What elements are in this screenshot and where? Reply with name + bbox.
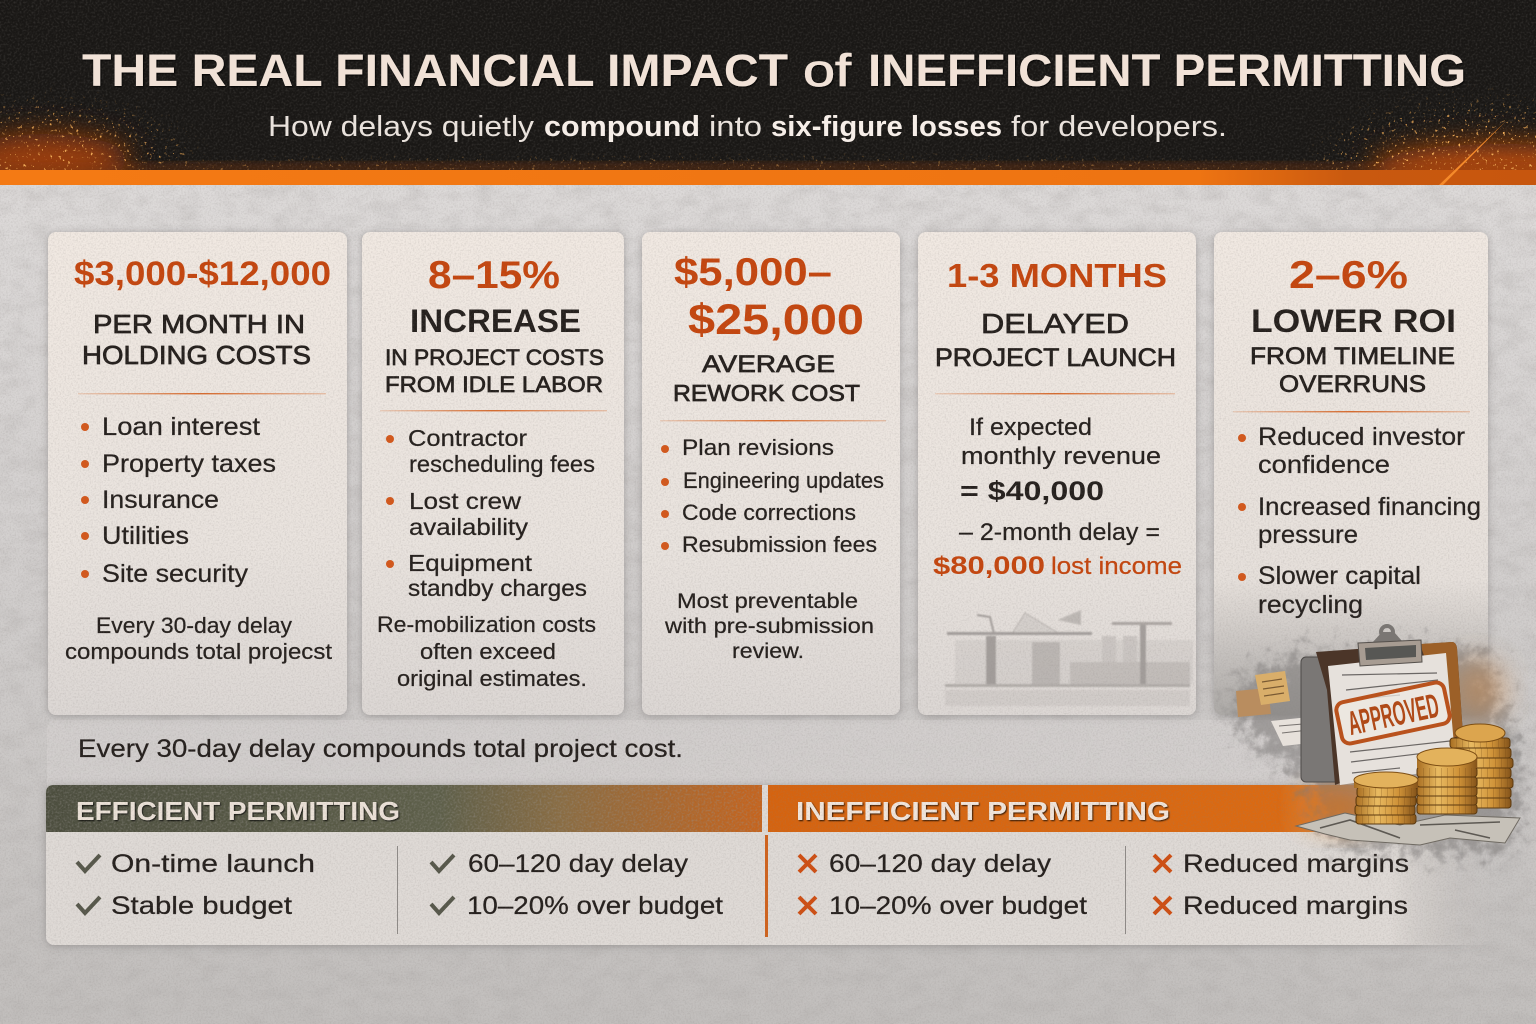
column: efficient left: Stable budget	[111, 892, 292, 920]
callout: delay compounds: Every 30-day delay compounds total project cost.	[78, 735, 683, 763]
list: holding cost items: Site security	[102, 560, 249, 588]
illustration: approved clipboard and coins	[1235, 626, 1520, 850]
note: pre-submission review: with pre-submission	[664, 615, 874, 638]
calculation: lost income: lost income	[1051, 553, 1182, 580]
heading: average rework cost	[673, 351, 860, 406]
header: efficient permitting	[46, 785, 762, 832]
list: idle labor items: standby charges	[408, 575, 587, 601]
list: ROI items: Reduced investor	[1258, 423, 1465, 451]
note: re-mobilization costs	[377, 612, 596, 691]
column: efficient left	[77, 850, 315, 920]
list: rework items: Resubmission fees	[682, 532, 877, 557]
list: holding cost items: Property taxes	[102, 450, 276, 478]
note: compounding delay: Every 30-day delay	[96, 613, 292, 638]
calculation: lost income: = $40,000	[960, 476, 1104, 506]
column: inefficient right: Reduced margins	[1183, 892, 1408, 920]
calculation: lost income: If expected	[969, 414, 1092, 441]
heading: lower ROI from timeline overruns	[1250, 303, 1456, 398]
panel: comparison table	[46, 785, 1490, 945]
subtitle: for developers.	[1011, 111, 1227, 143]
note: pre-submission review: Most preventable	[677, 590, 858, 613]
list: rework items: Code corrections	[682, 500, 856, 525]
stat: rework cost range	[674, 251, 864, 344]
heading: lower ROI from timeline overruns: FROM TIMELINE	[1250, 343, 1455, 370]
heading: average rework cost: REWORK COST	[673, 380, 860, 406]
heading: per month in holding costs	[82, 309, 311, 370]
spark streak	[1439, 120, 1507, 185]
title: THE REAL FINANCIAL IMPACT	[82, 45, 788, 96]
stamp: approved	[1335, 681, 1451, 745]
column: inefficient left	[799, 850, 1087, 920]
title: of	[803, 45, 852, 96]
header: inefficient permitting: INEFFICIENT PERMITTING	[796, 796, 1170, 826]
heading: per month in holding costs: PER MONTH IN	[93, 309, 305, 339]
note: re-mobilization costs: Re-mobilization costs	[377, 612, 596, 637]
note: pre-submission review: review.	[732, 640, 804, 663]
heading: average rework cost: AVERAGE	[702, 351, 835, 378]
icon: check	[77, 855, 100, 871]
subtitle: compound	[544, 111, 700, 143]
sticky notes	[1236, 671, 1319, 746]
card 4: delayed launch	[918, 232, 1196, 715]
subtitle: How delays quietly	[268, 111, 535, 143]
icon: cross	[799, 855, 816, 872]
header: efficient permitting: EFFICIENT PERMITTING	[76, 796, 400, 826]
list: ROI items: confidence	[1258, 451, 1390, 479]
orange accent bar	[0, 170, 1536, 185]
list: rework items: Engineering updates	[683, 468, 884, 493]
title: INEFFICIENT PERMITTING	[868, 45, 1466, 96]
heading: delayed project launch	[935, 308, 1176, 372]
list: ROI items: recycling	[1258, 591, 1363, 619]
heading: delayed project launch: DELAYED	[981, 308, 1129, 339]
card 2: idle labor	[362, 232, 624, 715]
note: re-mobilization costs: often exceed	[420, 639, 556, 664]
stat: delay months: 1-3 MONTHS	[947, 257, 1167, 294]
subtitle: into	[709, 111, 762, 143]
column: inefficient right	[1154, 850, 1409, 920]
heading: increase in project costs: FROM IDLE LABOR	[385, 372, 603, 397]
calculation: lost income: $80,000	[933, 552, 1045, 580]
stamp: approved: APPROVED	[1344, 687, 1442, 743]
list: idle labor items: rescheduling fees	[409, 451, 595, 477]
list: ROI items: pressure	[1258, 521, 1358, 549]
column: efficient left: On-time launch	[111, 850, 315, 878]
list: idle labor items: Equipment	[408, 550, 533, 576]
stat: rework cost range: $25,000	[688, 296, 864, 344]
header: inefficient permitting	[768, 785, 1368, 832]
list: holding cost items: Loan interest	[102, 413, 260, 441]
title	[82, 45, 1466, 96]
list: idle labor items: availability	[409, 514, 529, 540]
coin stack: rear	[1450, 724, 1513, 808]
list: rework items: Plan revisions	[682, 435, 834, 460]
list: ROI items: Slower capital	[1258, 562, 1421, 590]
heading: lower ROI from timeline overruns: LOWER ROI	[1251, 303, 1456, 339]
coin stack: front	[1354, 772, 1418, 824]
panel: efficient vs inefficient backdrop band	[47, 720, 1490, 800]
list: holding cost items: Insurance	[102, 486, 219, 514]
column: efficient right	[431, 850, 723, 920]
column: inefficient right: Reduced margins	[1183, 850, 1409, 878]
list: ROI items: Increased financing	[1258, 493, 1481, 521]
note: re-mobilization costs: original estimates.	[397, 666, 587, 691]
list: idle labor items	[386, 425, 595, 601]
heading: increase in project costs: INCREASE	[410, 303, 581, 339]
stat: rework cost range: $5,000–	[674, 251, 832, 294]
list: holding cost items: Utilities	[102, 522, 189, 550]
calculation: lost income: – 2-month delay =	[959, 519, 1160, 546]
calculation: lost income: monthly revenue	[961, 443, 1161, 470]
illustration: faded construction site	[945, 610, 1193, 706]
subtitle	[268, 111, 1227, 143]
card 3: rework cost	[642, 232, 900, 715]
list: idle labor items: Lost crew	[409, 488, 521, 514]
coin stack: middle	[1417, 748, 1477, 814]
card 5: lower ROI	[1214, 232, 1488, 715]
list: ROI items	[1238, 423, 1481, 619]
cash bills	[1296, 813, 1520, 845]
note: compounding delay: compounds total projecst	[65, 639, 332, 664]
smudge backdrop	[1235, 650, 1520, 850]
column: efficient right: 60–120 day delay	[468, 850, 689, 878]
stat: holding cost range: $3,000-$12,000	[74, 255, 331, 293]
list: holding cost items	[81, 413, 276, 588]
clipboard	[1301, 626, 1463, 785]
subtitle: six-figure losses	[771, 111, 1002, 143]
list: idle labor items: Contractor	[408, 425, 527, 451]
note: pre-submission review	[664, 590, 874, 663]
stat: cost increase percent: 8–15%	[428, 254, 560, 297]
note: compounding delay	[65, 613, 332, 664]
heading: per month in holding costs: HOLDING COSTS	[82, 340, 311, 370]
list: rework items	[661, 435, 884, 557]
calculation: lost income	[933, 414, 1182, 580]
column: inefficient left: 60–120 day delay	[829, 850, 1052, 878]
clip	[1358, 626, 1422, 666]
heading: increase in project costs	[385, 303, 604, 397]
column: inefficient left: 10–20% over budget	[829, 892, 1087, 920]
stat: ROI reduction: 2–6%	[1289, 254, 1408, 297]
card 1: holding costs	[48, 232, 347, 715]
heading: lower ROI from timeline overruns: OVERRUNS	[1279, 371, 1426, 398]
heading: increase in project costs: IN PROJECT COSTS	[385, 345, 604, 370]
header band	[0, 0, 1536, 196]
column: efficient right: 10–20% over budget	[467, 892, 723, 920]
heading: delayed project launch: PROJECT LAUNCH	[935, 344, 1176, 372]
